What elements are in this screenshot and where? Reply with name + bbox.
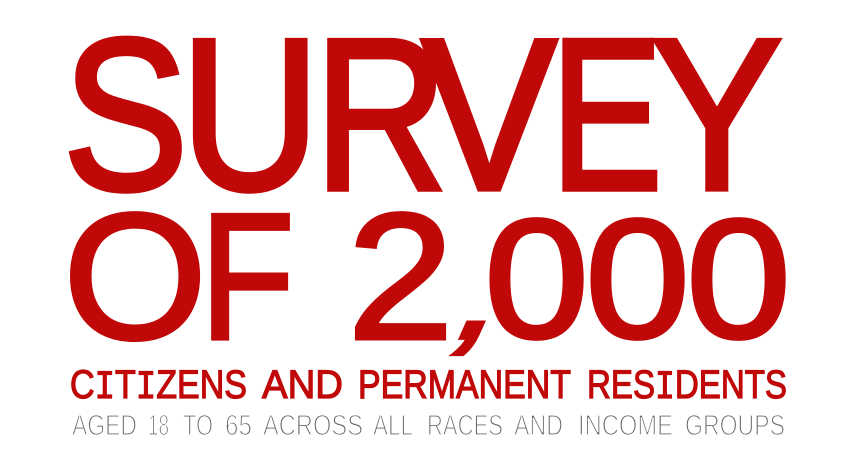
title line: SURVEY: V [422,0,557,235]
subtitle: citizens and permanent residents: CITIZENS [70,363,247,411]
title line: OF 2,000: 0 [686,184,791,373]
caption: age range and groups [72,410,785,442]
title line: OF 2,000: F [200,177,294,377]
caption: age range and groups: ACROSS [263,410,363,442]
subtitle: citizens and permanent residents [70,363,787,411]
title line: OF 2,000: 0 [585,184,690,373]
title line: OF 2,000: 0 [484,184,589,373]
title line: SURVEY: R [314,0,447,235]
caption: age range and groups: GROUPS [685,410,785,442]
subtitle: citizens and permanent residents: AND [262,363,343,407]
caption: age range and groups: INCOME [578,410,673,442]
title line: SURVEY [63,0,783,235]
caption: age range and groups: ALL [373,410,413,442]
caption: age range and groups: RACES [427,410,503,442]
title line: OF 2,000: 2 [347,177,454,377]
caption: age range and groups: AGED [72,410,137,442]
title line: SURVEY: U [180,0,320,235]
subtitle: citizens and permanent residents: PERMANENT [358,363,571,407]
title line: SURVEY: E [551,0,662,235]
caption: age range and groups: TO [183,410,213,442]
title line: SURVEY: S [63,0,188,235]
title line: OF 2,000 [63,176,791,377]
caption: age range and groups: 18 [148,410,169,442]
caption: age range and groups: 65 [225,410,252,442]
subtitle: citizens and permanent residents: RESIDENTS [587,363,787,411]
title line: SURVEY: Y [651,0,783,235]
caption: age range and groups: AND [514,410,563,442]
title line: OF 2,000: , [443,243,526,360]
title line: OF 2,000: O [63,176,207,377]
